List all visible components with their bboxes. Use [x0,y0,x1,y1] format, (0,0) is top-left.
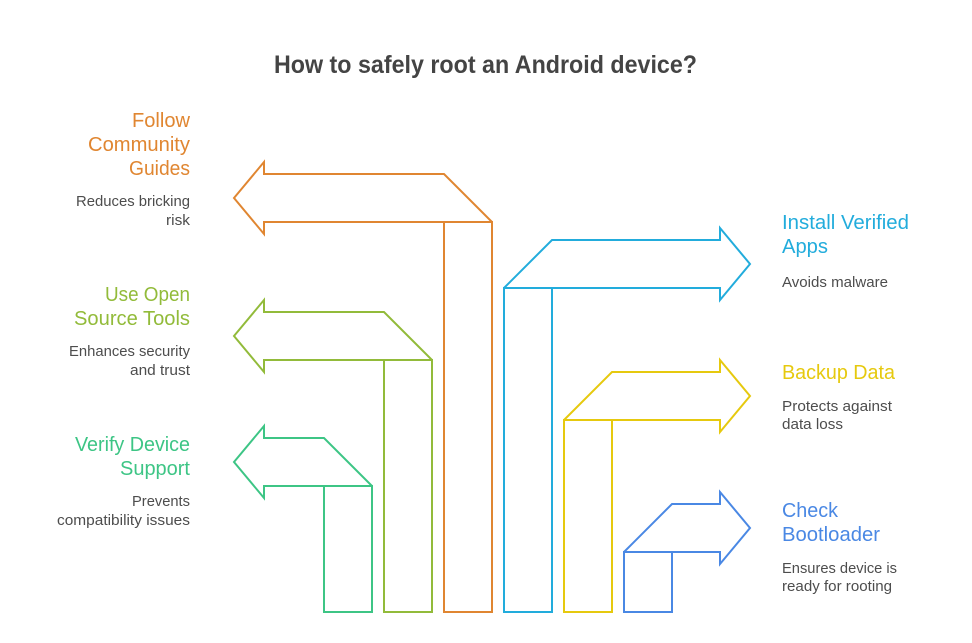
arrow: use open source tools [234,300,432,612]
text block: follow community guides [76,110,191,229]
description: ensures device is ready for rooting: Ensures device is [782,561,897,577]
arrow: backup data [564,360,750,612]
heading: check bootloader: Bootloader [782,524,880,546]
heading: verify device support: Verify Device [75,434,190,456]
description: protects against data loss [782,399,892,433]
description: reduces bricking risk: risk [166,213,191,229]
text block: install verified apps [782,212,909,291]
heading: follow community guides [88,110,191,180]
description: protects against data loss: data loss [782,417,843,433]
heading: follow community guides: Guides [129,158,190,180]
arrow: verify device support [234,426,372,612]
description: reduces bricking risk [76,194,191,229]
description: reduces bricking risk: Reduces bricking [76,194,190,210]
heading: follow community guides: Follow [132,110,191,132]
description: enhances security and trust: and trust [130,363,190,379]
description: enhances security and trust: Enhances security [69,344,191,360]
arrow: check bootloader [624,492,750,612]
heading: follow community guides: Community [88,134,190,156]
description: ensures device is ready for rooting: ready for rooting [782,579,892,595]
text block: backup data [782,362,896,433]
heading: verify device support [75,434,190,480]
heading: install verified apps: Apps [782,236,828,258]
description: prevents compatibility issues: Prevents [132,494,190,510]
title: How to safely root an Android device? [274,51,697,79]
description: enhances security and trust [69,344,191,379]
heading: use open source tools: Source Tools [74,308,190,330]
heading: backup data: Backup Data [782,362,896,384]
description: prevents compatibility issues: compatibility issues [57,513,190,529]
heading: install verified apps: Install Verified [782,212,909,234]
heading: check bootloader [782,500,880,546]
description: protects against data loss: Protects against [782,399,892,415]
description: prevents compatibility issues [57,494,190,529]
text block: verify device support [57,434,190,529]
arrow: install verified apps [504,228,750,612]
heading: use open source tools [74,284,190,330]
text block: check bootloader [782,500,897,595]
description: ensures device is ready for rooting [782,561,897,595]
heading: use open source tools: Use Open [105,284,190,306]
text block: use open source tools [69,284,191,379]
heading: install verified apps [782,212,909,258]
heading: verify device support: Support [120,458,190,480]
heading: check bootloader: Check [782,500,839,522]
arrow: follow community guides [234,162,492,612]
description: avoids malware: Avoids malware [782,275,888,291]
